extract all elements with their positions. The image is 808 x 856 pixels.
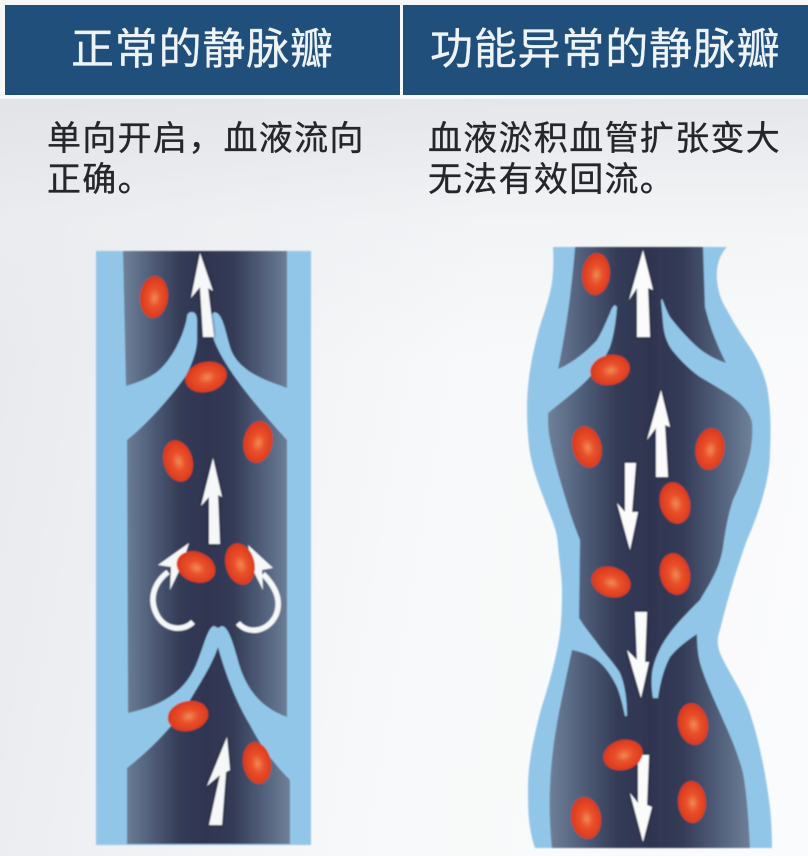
text: normal valve description — [47, 120, 365, 199]
arrow: up in lower chamber — [207, 737, 230, 825]
arrow: down in lower chamber — [630, 755, 652, 842]
dilated lumen: upper and middle chambers — [548, 247, 752, 848]
text: abnormal valve description: 无法有效回流。 — [428, 161, 675, 199]
arrow: down reflux in dilated chamber — [617, 463, 638, 550]
diagram: abnormal vein — [527, 247, 772, 848]
arrow: up through open valve — [191, 253, 214, 337]
text: normal valve description: 单向开启，血液流向 — [47, 120, 365, 158]
dilated vein wall — [527, 247, 772, 848]
red blood cells — [138, 275, 276, 786]
heading: normal vein valve: 正常的静脉瓣 — [71, 26, 334, 74]
heading: abnormal vein valve: 功能异常的静脉瓣 — [430, 26, 780, 74]
arrow: up in middle chamber — [201, 458, 222, 544]
arrow: down through lower valve — [627, 612, 649, 698]
heading: normal vein valve — [5, 5, 400, 95]
arrow: right curved backflow — [238, 545, 278, 630]
arrow: left curved backflow — [153, 543, 193, 628]
arrow: up through upper valve — [629, 250, 653, 337]
text: abnormal valve description: 血液淤积血管扩张变大 — [428, 120, 781, 158]
text: normal valve description: 正确。 — [47, 161, 153, 199]
red blood cells — [568, 252, 727, 841]
diagram: normal vein — [96, 251, 311, 845]
vein lumen: lower chamber — [127, 647, 290, 844]
vein lumen: upper and middle chambers with open valve — [123, 251, 287, 717]
heading: abnormal vein valve — [403, 5, 808, 95]
arrow: up in dilated chamber — [647, 390, 670, 477]
vein wall — [96, 251, 311, 845]
text: abnormal valve description — [428, 120, 781, 199]
